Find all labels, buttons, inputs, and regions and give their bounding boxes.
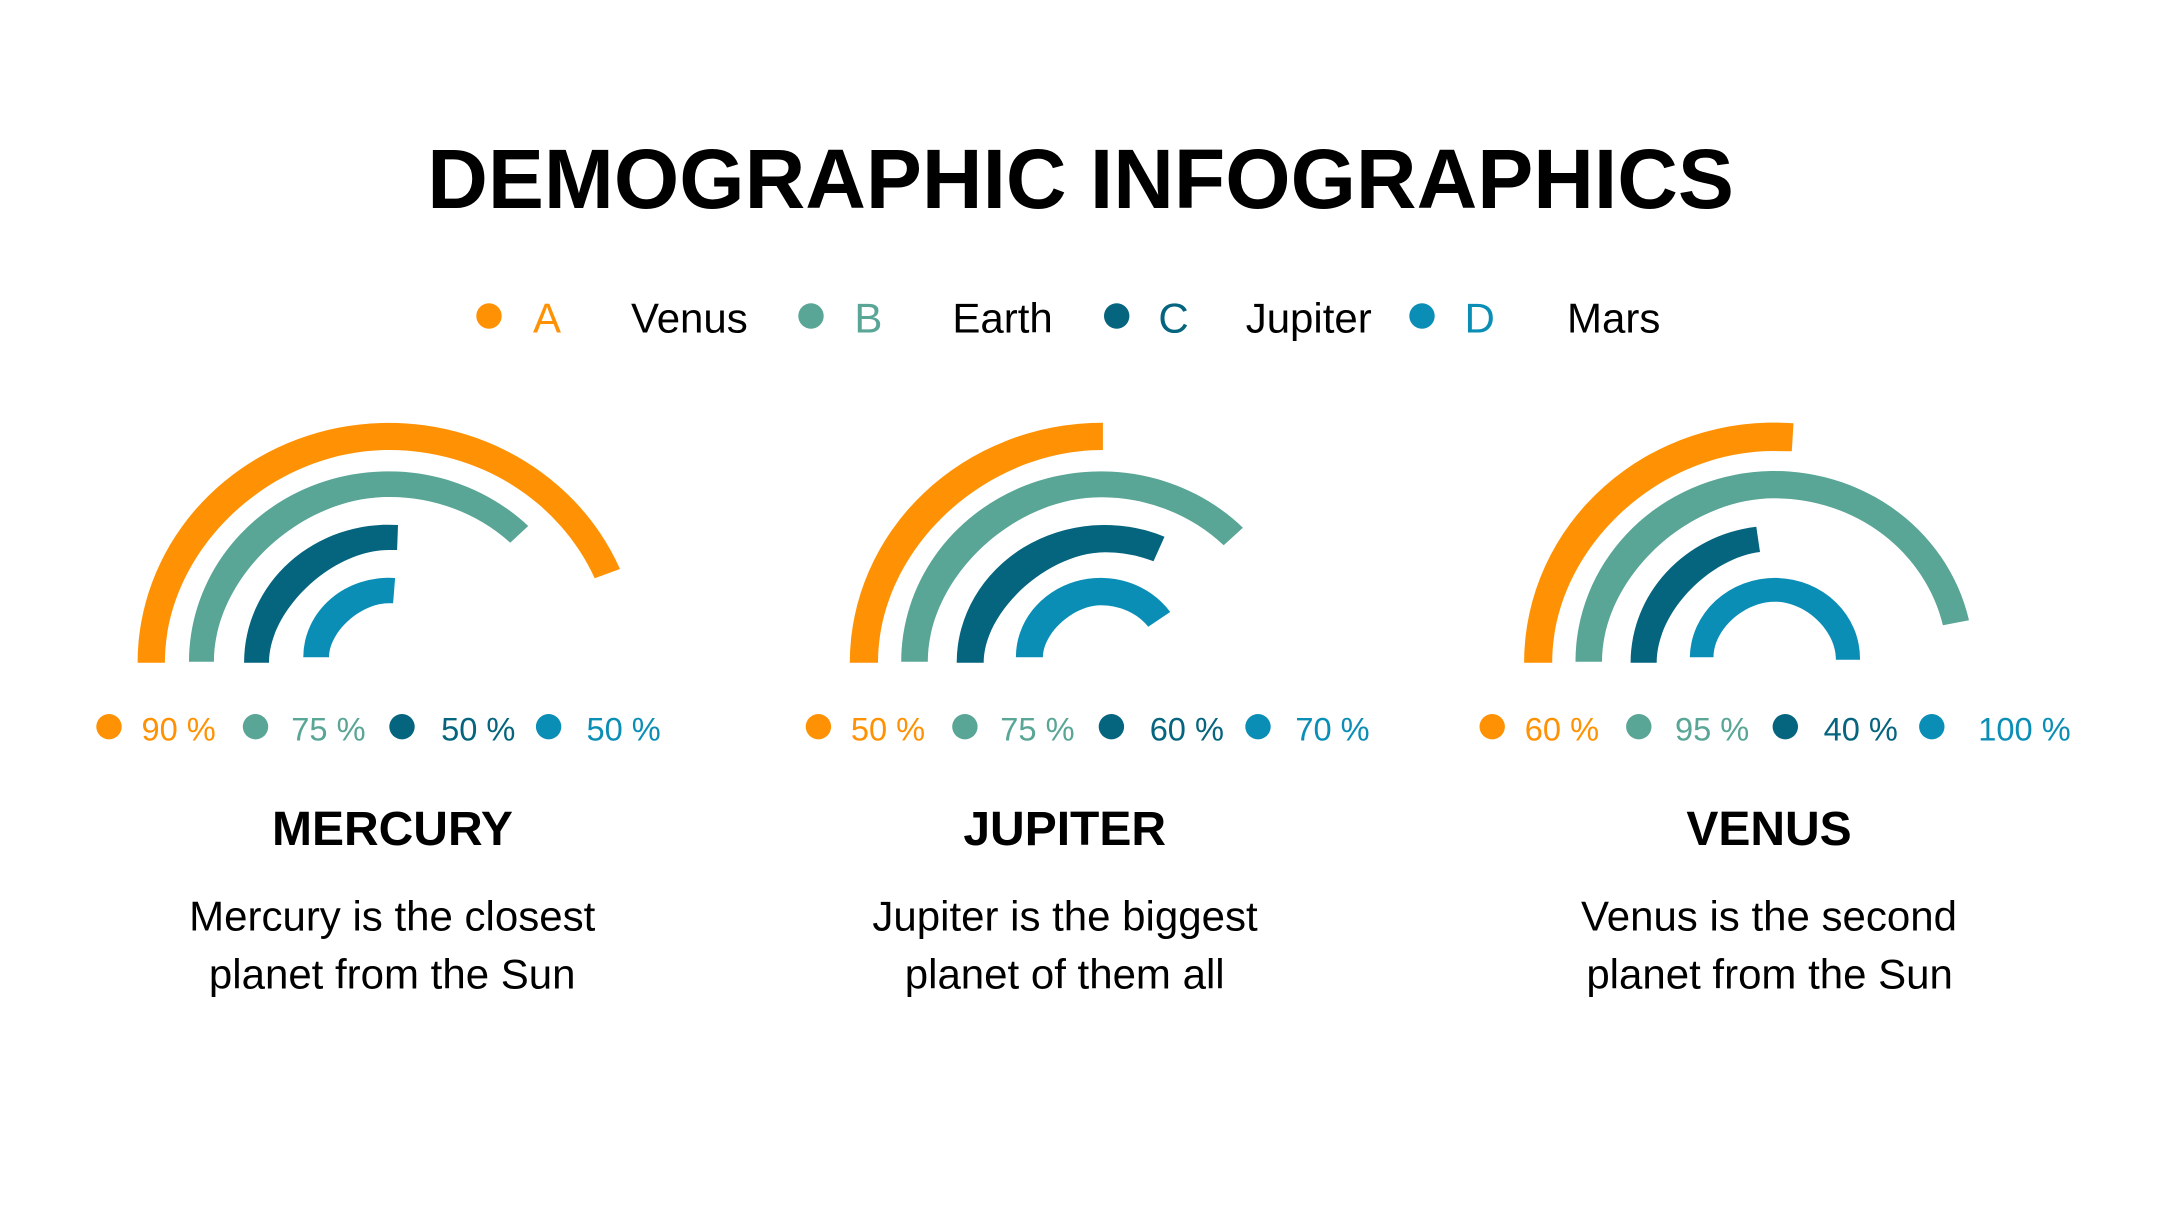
heading: Jupiter: JUPITER <box>963 803 1166 856</box>
percentages: Jupiter: 50 % <box>851 710 925 748</box>
description: Venus: Venus is the second <box>1581 893 1957 940</box>
percentages: Venus: 60 % <box>1525 710 1599 748</box>
title: DEMOGRAPHIC INFOGRAPHICS <box>427 132 1734 226</box>
legend item: A Venus <box>476 294 748 342</box>
percentages: Mercury: 90 % <box>142 710 216 748</box>
percentages: Jupiter: 75 % <box>1000 710 1075 748</box>
percentages: Mercury: 50 % <box>586 710 661 748</box>
percentages: Venus: 95 % <box>1675 710 1749 748</box>
description: Venus: planet from the Sun <box>1586 950 1953 997</box>
panel: Venus <box>1480 423 2071 997</box>
panel: Mercury <box>96 423 661 997</box>
heading: Venus: VENUS <box>1686 803 1852 856</box>
legend item: C Jupiter <box>1104 294 1372 342</box>
legend item: B Earth: Earth <box>952 294 1053 342</box>
legend item: D Mars: D <box>1464 294 1495 342</box>
legend item: A Venus: Venus <box>631 294 748 342</box>
arc chart: Jupiter <box>850 423 1243 663</box>
percentages: Venus <box>1480 710 2071 748</box>
legend item: C Jupiter: Jupiter <box>1246 294 1372 342</box>
description: Mercury: Mercury is the closest <box>189 893 596 940</box>
percentages: Jupiter: 60 % <box>1150 710 1224 748</box>
legend <box>476 294 1660 342</box>
description: Jupiter: planet of them all <box>905 950 1225 997</box>
percentages: Jupiter <box>806 710 1370 748</box>
arc chart: Venus <box>1524 423 1969 663</box>
description: Jupiter: Jupiter is the biggest <box>872 893 1258 940</box>
panel: Jupiter <box>806 423 1370 997</box>
legend item: D Mars: Mars <box>1567 294 1660 342</box>
percentages: Mercury: 50 % <box>441 710 515 748</box>
percentages: Venus: 40 % <box>1824 710 1898 748</box>
legend item: C Jupiter: C <box>1158 294 1189 342</box>
legend item: A Venus: A <box>533 294 561 342</box>
percentages: Jupiter: 70 % <box>1295 710 1370 748</box>
percentages: Mercury: 75 % <box>291 710 366 748</box>
legend item: B Earth <box>798 294 1053 342</box>
percentages: Venus: 100 % <box>1978 710 2071 748</box>
description: Mercury: planet from the Sun <box>209 950 575 997</box>
heading: Mercury: MERCURY <box>272 803 513 856</box>
arc chart: Mercury <box>138 423 620 663</box>
percentages: Mercury <box>96 710 661 748</box>
legend item: D Mars <box>1409 294 1660 342</box>
legend item: B Earth: B <box>854 294 882 342</box>
